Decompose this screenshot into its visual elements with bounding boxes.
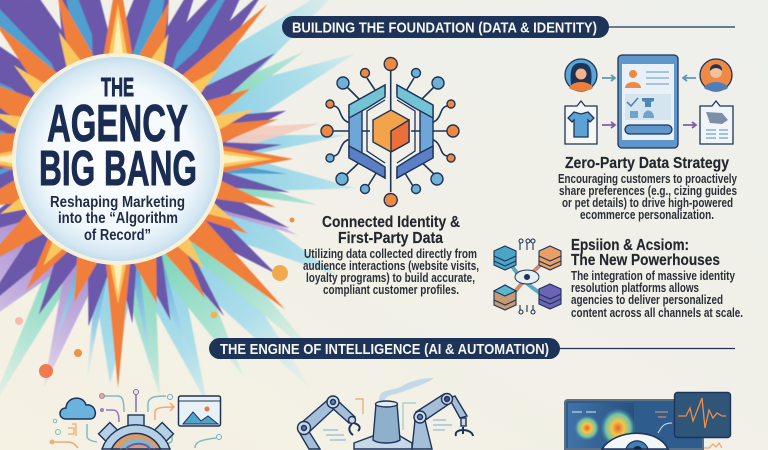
- cross links: [512, 262, 544, 296]
- avatar: woman: [565, 59, 597, 91]
- starburst explosion: [0, 0, 370, 425]
- title: The Agency Big Bang: THE: [101, 72, 134, 102]
- heading banner: engine of intelligence: [209, 338, 735, 359]
- icon: monitor with heatmap, eye and waveform: [565, 392, 730, 449]
- network nodes: [321, 58, 459, 206]
- subtitle: into the “Algorithm: [58, 210, 178, 227]
- connector lines: [52, 392, 216, 448]
- text block: zero-party data: ecommerce personalization.: [580, 208, 714, 222]
- data flow arrows: [602, 75, 696, 128]
- tablet: [618, 55, 678, 148]
- text block: epsilon and acxiom: resolution platforms allows: [571, 281, 699, 295]
- icon: robotic arms and chimney: [298, 378, 473, 449]
- decorative dots: [15, 218, 294, 378]
- text block: epsilon and acxiom: The New Powerhouses: [571, 252, 720, 269]
- heading banner: building the foundation: BUILDING THE FOUNDATION (DATA & IDENTITY): [292, 20, 597, 36]
- text block: connected identity: loyalty programs) to build accurate,: [306, 271, 475, 285]
- text block: zero-party data: Zero-Party Data Strategy: [565, 155, 729, 172]
- text block: epsilon and acxiom: Epsiion & Acsiom:: [571, 237, 689, 254]
- left robot arm: [298, 396, 360, 449]
- monitor: [565, 400, 703, 449]
- right robot arm: [412, 394, 473, 449]
- text block: connected identity: compliant customer profiles.: [323, 283, 459, 297]
- text block: connected identity: First-Party Data: [338, 230, 443, 247]
- heatmap: [568, 403, 672, 448]
- title orb: [12, 53, 224, 265]
- card: pet details: [700, 101, 733, 144]
- icon: linked data stacks: [494, 239, 561, 314]
- heading banner: building the foundation: [282, 16, 735, 38]
- icon: AI gear with cloud and window: [50, 390, 222, 449]
- text block: epsilon and acxiom: agencies to deliver personalized: [571, 293, 723, 307]
- heading banner: engine of intelligence: THE ENGINE OF INTELLIGENCE (AI & AUTOMATION): [220, 341, 549, 358]
- text block: connected identity: [303, 214, 479, 297]
- secondary waveform: [704, 443, 722, 448]
- gear: [99, 415, 173, 449]
- cloud: [60, 398, 95, 419]
- chimney and base: [354, 401, 412, 449]
- text block: epsilon and acxiom: [571, 237, 743, 320]
- title: The Agency Big Bang: BIG BANG: [39, 142, 197, 196]
- orange core cube: [373, 110, 409, 152]
- title: The Agency Big Bang: [39, 72, 197, 196]
- smoke: [379, 378, 434, 402]
- right bracket: [397, 85, 433, 178]
- icon: connected identity network: [321, 58, 459, 206]
- top-left solid fill rays: [0, 0, 294, 198]
- eye: [602, 433, 668, 449]
- connector nodes: [50, 390, 222, 444]
- left bracket: [349, 85, 385, 178]
- oscilloscope panel: [674, 392, 730, 438]
- text block: connected identity: audience interactions (website visits,: [303, 259, 479, 273]
- process lines: [323, 399, 452, 440]
- avatar: man: [700, 59, 732, 91]
- text block: connected identity: Connected Identity &: [322, 214, 460, 231]
- icon: zero-party data tablet: [565, 55, 733, 148]
- text block: zero-party data: [558, 155, 737, 222]
- subtitle: Reshaping Marketing: [50, 194, 185, 211]
- title: The Agency Big Bang: AGENCY: [47, 95, 188, 153]
- card: shirt: [565, 101, 597, 144]
- subtitle: [50, 194, 185, 244]
- text block: connected identity: Utilizing data collected directly from: [304, 247, 477, 261]
- subtitle: of Record”: [84, 227, 151, 244]
- data stacks: [494, 246, 561, 310]
- browser window: [178, 396, 220, 426]
